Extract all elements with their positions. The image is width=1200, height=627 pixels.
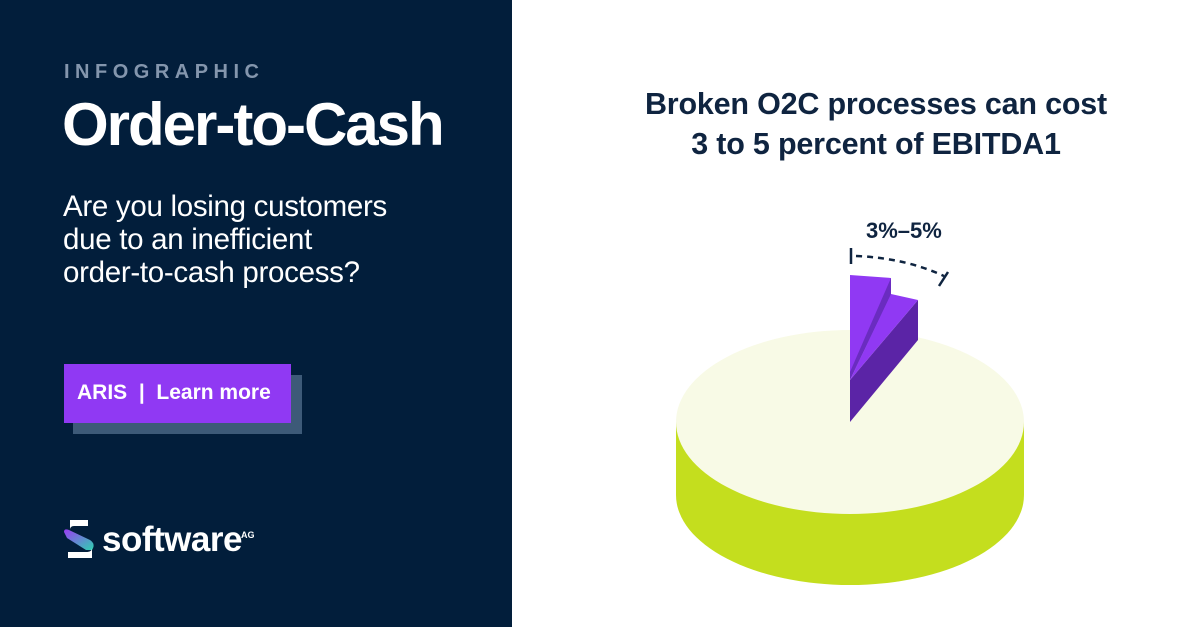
purple slice [850,275,918,422]
subtitle [63,190,387,289]
button: ARIS learn more [64,364,302,434]
logo: software AG: software [102,520,242,559]
annotation arc [851,248,948,286]
chart: 3D pie [676,218,1024,585]
main heading: Order-to-Cash [62,91,443,158]
label 3%-5%: 3%–5% [866,218,942,243]
chart title: 3 to 5 percent of EBITDA1 [691,127,1061,161]
logo: software AG: AG [241,530,254,540]
panel: left dark [0,0,512,627]
subtitle: Are you losing customers [63,190,387,223]
chart title [645,87,1107,161]
subtitle: order-to-cash process? [63,256,360,289]
subtitle: due to an inefficient [63,223,312,256]
button: ARIS learn more: ARIS | Learn more [77,381,271,404]
chart title: Broken O2C processes can cost [645,87,1107,121]
pie side [676,422,1024,585]
pie top [676,330,1024,514]
eyebrow label: INFOGRAPHIC [64,61,264,83]
